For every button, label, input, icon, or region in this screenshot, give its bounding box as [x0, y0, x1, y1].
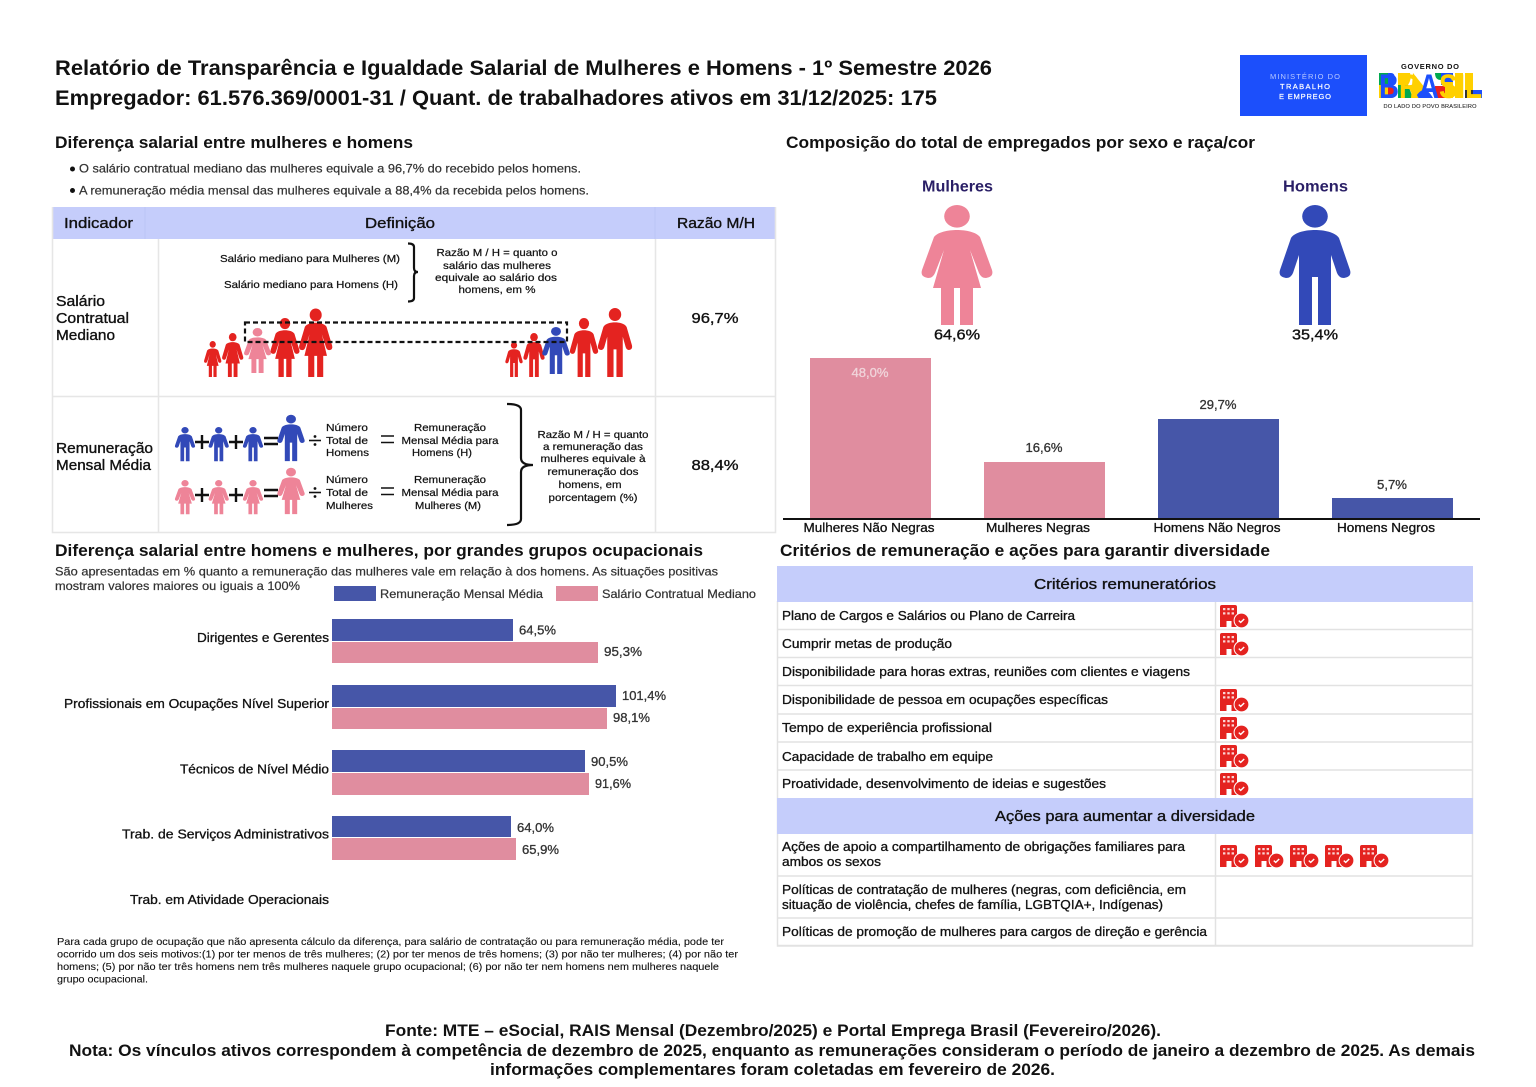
group: técnicos de nível médio: 91,6%	[595, 777, 631, 791]
row label: salário contratual mediano: Salário	[56, 294, 105, 310]
legend	[334, 586, 756, 601]
row label: salário contratual mediano	[56, 294, 129, 344]
row label: salário contratual mediano: Mediano	[56, 328, 115, 344]
footnote: grupo ocupacional.	[57, 974, 148, 986]
text block: key findings	[70, 162, 589, 198]
formula: women: Mensal Média para	[402, 488, 499, 499]
formula: men: Remuneração	[414, 423, 486, 434]
row label: remuneração mensal média	[56, 441, 153, 474]
heading: critérios: Critérios de remuneração e ações para garantir diversidade	[780, 542, 1270, 560]
ratio explanation: salário	[435, 248, 558, 296]
formula: women: Número	[326, 475, 368, 486]
group: dirigentes e gerentes: 64,5%	[519, 624, 556, 638]
legend: Remuneração Mensal Média	[380, 587, 543, 601]
formula: women: Mulheres	[326, 501, 373, 512]
logo word: BRASIL	[1379, 68, 1482, 106]
criterion rows: Plano de Cargos e Salários ou Plano de Carreira	[782, 609, 1075, 623]
footer source note: Fonte: MTE – eSocial, RAIS Mensal (Dezembro/2025) e Portal Emprega Brasil (Fevereiro/2026).	[385, 1022, 1161, 1040]
formula: women: Remuneração	[414, 475, 486, 486]
action rows: situação de violência, chefes de família, LGBTQIA+, Indígenas)	[782, 898, 1163, 912]
criterion rows: Disponibilidade para horas extras, reuniões com clientes e viagens	[782, 665, 1190, 679]
group: dirigentes e gerentes	[197, 619, 642, 663]
value: 88,4%: 88,4%	[692, 458, 739, 474]
ratio explanation: remuneração: homens, em	[558, 480, 622, 491]
footnote: Para cada grupo de ocupação que não apresenta cálculo da diferença, para salário de contratação ou para remuneração média, pode ter	[57, 937, 725, 948]
heading: diferença salarial: Diferença salarial entre mulheres e homens	[55, 134, 413, 152]
formula: men: Total de	[326, 436, 368, 447]
logo: Ministério do Trabalho e Emprego	[1240, 55, 1367, 116]
ratio explanation: salário: equivale ao salário dos	[435, 273, 557, 284]
panel: women share	[922, 178, 993, 344]
ratio explanation: remuneração: remuneração dos	[548, 467, 638, 478]
bar chart: composition by race: 16,6%	[1026, 441, 1062, 455]
formula: men: Número	[326, 423, 368, 434]
criterion rows	[782, 609, 1190, 791]
formula: women	[175, 468, 499, 514]
definition text: salário mediano	[220, 254, 400, 291]
group: serviços administrativos: Trab. de Serviços Administrativos	[122, 828, 329, 842]
action rows: ambos os sexos	[782, 855, 881, 869]
group: serviços administrativos	[122, 816, 559, 860]
panel: men share: Homens	[1283, 178, 1348, 196]
bar chart: composition by race: Homens Não Negros	[1154, 521, 1280, 535]
icon: men ordered by salary	[505, 308, 632, 377]
criterion rows: Proatividade, desenvolvimento de ideias e sugestões	[782, 777, 1106, 791]
group: serviços administrativos: 65,9%	[522, 843, 559, 857]
big brace	[507, 404, 533, 525]
bar chart: occupational groups	[64, 619, 666, 907]
ratio explanation: remuneração	[538, 430, 649, 504]
panel: women share: 64,6%	[934, 328, 980, 344]
footnote	[57, 937, 739, 986]
panel: remuneration criteria table	[777, 566, 1473, 946]
logo: Ministério do Trabalho e Emprego: TRABALHO	[1280, 82, 1330, 91]
bar chart: composition by race: Mulheres Negras	[986, 521, 1090, 535]
footer source note	[69, 1022, 1475, 1079]
panel: men share: 35,4%	[1292, 328, 1338, 344]
action rows	[782, 840, 1207, 939]
panel: women share: Mulheres	[922, 178, 993, 196]
text block: key findings: O salário contratual mediano das mulheres equivale a 96,7% do recebido pelos homens.	[79, 162, 581, 176]
criterion rows: Disponibilidade de pessoa em ocupações específicas	[782, 693, 1108, 707]
formula: women: Mulheres (M)	[415, 501, 481, 512]
header: ações diversidade: Ações para aumentar a diversidade	[995, 809, 1255, 825]
header: critérios remuneratórios: Critérios remuneratórios	[1034, 577, 1216, 593]
text block: key findings: A remuneração média mensal das mulheres equivale a 88,4% da recebida pelos homens.	[79, 184, 589, 198]
logo: Ministério do Trabalho e Emprego: MINISTÉRIO DO	[1270, 72, 1340, 81]
title	[55, 57, 992, 110]
text block: chart description	[55, 564, 718, 593]
group: profissionais nível superior: 101,4%	[622, 689, 666, 703]
footer source note: informações complementares foram coletadas em fevereiro de 2026.	[490, 1061, 1055, 1079]
criterion rows: Capacidade de trabalho em equipe	[782, 750, 993, 764]
value: 96,7%: 96,7%	[692, 311, 739, 327]
legend: Salário Contratual Mediano	[602, 587, 756, 601]
footnote: ocorrido um dos seis motivos:(1) por ter menos de três mulheres; (2) por ter menos de três homens; (3) por não ter mulheres; (4) por não ter	[57, 950, 739, 960]
table header: Indicador	[64, 216, 133, 232]
header: ações diversidade	[777, 798, 1473, 834]
dashed median highlight	[245, 322, 567, 342]
ratio explanation: salário: salário das mulheres	[443, 261, 551, 272]
icons: companies with action	[1220, 845, 1389, 868]
ratio explanation: remuneração: Razão M / H = quanto	[538, 430, 649, 441]
ratio explanation: salário: Razão M / H = quanto o	[436, 248, 558, 259]
group: profissionais nível superior: 98,1%	[613, 711, 650, 725]
criterion rows: Cumprir metas de produção	[782, 637, 952, 651]
table header: Definição	[365, 216, 435, 232]
criterion rows: Tempo de experiência profissional	[782, 721, 992, 735]
footer source note: Nota: Os vínculos ativos correspondem à competência de dezembro de 2025, enquanto as remunerações consideram o período de janeiro a dezembro de 2025. As demais	[69, 1042, 1475, 1060]
ratio explanation: remuneração: a remuneração das	[543, 442, 643, 453]
footnote: homens; (5) por não ter três homens nem três mulheres naquele grupo ocupacional; (6) por não ter nem homens nem mulheres naquele	[57, 962, 719, 973]
bar chart: composition by race	[783, 358, 1480, 535]
bar chart: composition by race: 5,7%	[1377, 478, 1407, 492]
icons: companies with criterion	[1220, 605, 1249, 796]
bar chart: composition by race: 48,0%	[852, 366, 888, 380]
title: Relatório de Transparência e Igualdade Salarial de Mulheres e Homens - 1º Semestre 2026	[55, 57, 992, 80]
group: atividade operacional: Trab. em Atividade Operacionais	[130, 893, 329, 907]
definition text: salário mediano: Salário mediano para Homens (H)	[224, 280, 398, 291]
text block: chart description: São apresentadas em % quanto a remuneração das mulheres vale em relação à dos homens. As situações positivas	[55, 564, 718, 578]
formula: men	[175, 415, 499, 461]
formula: men: Mensal Média para	[402, 436, 499, 447]
ratio explanation: salário: homens, em %	[458, 285, 536, 296]
heading: grupos ocupacionais: Diferença salarial entre homens e mulheres, por grandes grupos ocupacionais	[55, 542, 703, 560]
header: critérios remuneratórios	[777, 566, 1473, 602]
group: dirigentes e gerentes: Dirigentes e Gerentes	[197, 631, 329, 645]
logo: Governo do Brasil: GOVERNO DO	[1401, 62, 1459, 71]
formula: women: Total de	[326, 488, 368, 499]
logo: Ministério do Trabalho e Emprego: E EMPREGO	[1279, 92, 1331, 101]
formula: men: Homens	[326, 448, 369, 459]
bar chart: composition by race: Mulheres Não Negras	[804, 521, 934, 535]
panel: indicator table	[52, 207, 776, 532]
group: técnicos de nível médio: Técnicos de Nível Médio	[180, 762, 329, 776]
ratio explanation: remuneração: porcentagem (%)	[548, 493, 638, 504]
table header: Razão M/H	[677, 216, 755, 232]
group: serviços administrativos: 64,0%	[517, 821, 554, 835]
panel: men share	[1280, 178, 1350, 344]
brace	[408, 244, 418, 302]
group: técnicos de nível médio: 90,5%	[591, 755, 628, 769]
action rows: Ações de apoio a compartilhamento de obrigações familiares para	[782, 840, 1185, 854]
row label: remuneração mensal média: Mensal Média	[56, 458, 152, 474]
ratio explanation: remuneração: mulheres equivale à	[540, 454, 646, 465]
action rows: Políticas de contratação de mulheres (negras, com deficiência, em	[782, 883, 1186, 897]
table header	[52, 207, 776, 239]
logo: Governo do Brasil	[1379, 62, 1482, 110]
bar chart: composition by race: 29,7%	[1200, 398, 1236, 412]
row label: salário contratual mediano: Contratual	[56, 311, 129, 327]
group: dirigentes e gerentes: 95,3%	[604, 645, 642, 659]
group: técnicos de nível médio	[180, 750, 631, 795]
heading: composição: Composição do total de empregados por sexo e raça/cor	[786, 134, 1256, 152]
group: profissionais nível superior	[64, 685, 666, 729]
logo: Governo do Brasil: DO LADO DO POVO BRASILEIRO	[1384, 104, 1477, 110]
text block: chart description: mostram valores maiores ou iguais a 100%	[55, 579, 300, 593]
title: Empregador: 61.576.369/0001-31 / Quant. de trabalhadores ativos em 31/12/2025: 175	[55, 87, 937, 110]
bar chart: composition by race: Homens Negros	[1337, 521, 1435, 535]
action rows: Políticas de promoção de mulheres para cargos de direção e gerência	[782, 925, 1207, 939]
group: profissionais nível superior: Profissionais em Ocupações Nível Superior	[64, 697, 329, 711]
row label: remuneração mensal média: Remuneração	[56, 441, 153, 457]
formula: men: Homens (H)	[412, 448, 472, 459]
icon: women ordered by salary	[204, 308, 332, 377]
definition text: salário mediano: Salário mediano para Mulheres (M)	[220, 254, 400, 265]
logo colour blocks	[1379, 73, 1482, 98]
